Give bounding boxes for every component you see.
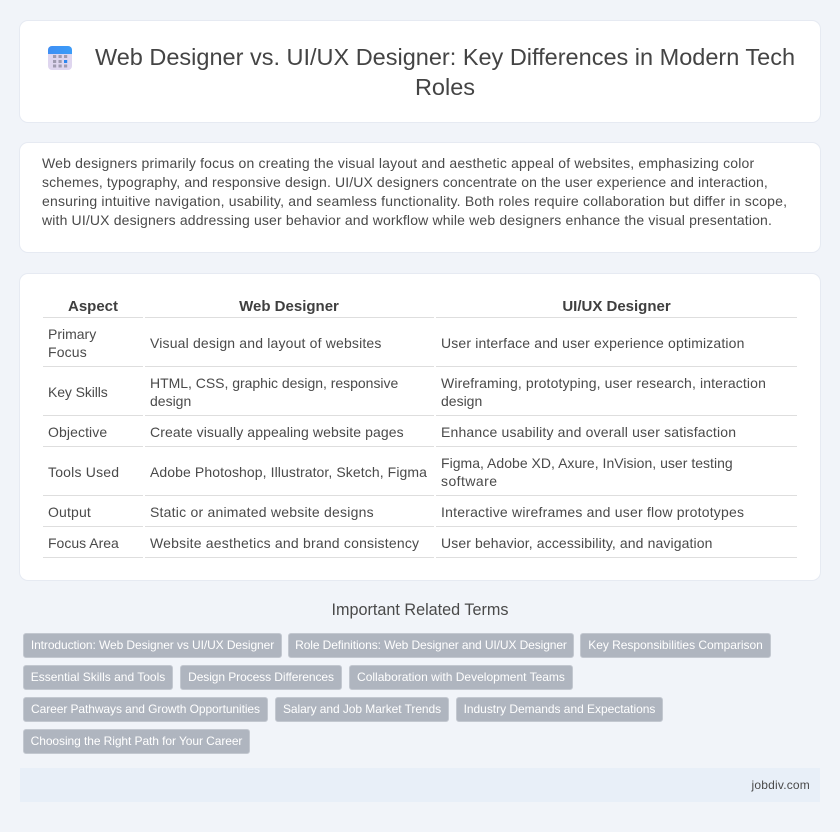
table header: Web Designer [239, 298, 339, 315]
related terms tags: Introduction: Web Designer vs UI/UX Designer [31, 638, 274, 652]
row: tools used: Figma, Adobe XD, Axure, InVision, user testing [441, 455, 733, 471]
table header: UI/UX Designer [562, 298, 671, 315]
footer source text: jobdiv.com [752, 778, 810, 792]
row: primary focus: Primary [48, 326, 96, 342]
intro paragraph [42, 155, 787, 228]
row: key skills: Wireframing, prototyping, user research, interaction [441, 375, 766, 391]
row: focus area [48, 535, 713, 551]
row: tools used: Tools Used [48, 464, 119, 480]
title: Roles [415, 74, 475, 100]
row: focus area: Website aesthetics and brand consistency [150, 535, 419, 551]
row: objective: Objective [48, 424, 107, 440]
comparison table card [20, 274, 820, 580]
row: key skills: Key Skills [48, 384, 108, 400]
title: Web Designer vs. UI/UX Designer: Key Differences in Modern Tech [95, 44, 795, 70]
intro text card [20, 143, 820, 252]
row: output [48, 504, 744, 520]
related terms tags: Role Definitions: Web Designer and UI/UX Designer [295, 638, 567, 652]
related terms tags: Salary and Job Market Trends [283, 702, 441, 716]
row: key skills: design [441, 393, 482, 409]
title [95, 44, 795, 100]
row: output: Static or animated website designs [150, 504, 374, 520]
row: key skills: HTML, CSS, graphic design, responsive [150, 375, 398, 391]
intro paragraph: with UI/UX designers addressing user behavior and workflow while web designers enhance the visual presentation. [42, 212, 772, 228]
row: objective [48, 424, 736, 440]
row: primary focus: Focus [48, 344, 87, 360]
row: focus area: User behavior, accessibility, and navigation [441, 535, 713, 551]
row: output: Interactive wireframes and user flow prototypes [441, 504, 744, 520]
related terms heading: Important Related Terms [332, 601, 508, 619]
row: objective: Create visually appealing website pages [150, 424, 404, 440]
row: output: Output [48, 504, 91, 520]
footer bar [20, 768, 820, 802]
row: primary focus [48, 326, 745, 360]
row: tools used [48, 455, 733, 489]
row: focus area: Focus Area [48, 535, 119, 551]
related terms tags: Industry Demands and Expectations [464, 702, 655, 716]
row: tools used: software [441, 473, 498, 489]
intro paragraph: Web designers primarily focus on creating the visual layout and aesthetic appeal of websites, emphasizing color [42, 155, 754, 171]
row: primary focus: Visual design and layout of websites [150, 335, 382, 351]
related terms tags: Collaboration with Development Teams [357, 670, 565, 684]
related terms tags: Career Pathways and Growth Opportunities [31, 702, 260, 716]
intro paragraph: schemes, typography, and responsive design. UI/UX designers concentrate on the user experience and interaction, [42, 174, 768, 190]
table header: Aspect [68, 298, 118, 315]
related terms tags: Design Process Differences [188, 670, 334, 684]
related terms tags: Choosing the Right Path for Your Career [31, 734, 242, 748]
related terms tags: Essential Skills and Tools [31, 670, 165, 684]
intro paragraph: ensuring intuitive navigation, usability, and seamless functionality. Both roles require collaboration but differ in scope, [42, 193, 787, 209]
row: primary focus: User interface and user experience optimization [441, 335, 745, 351]
row: key skills: design [150, 393, 191, 409]
related terms tags [23, 633, 771, 754]
row: key skills [48, 375, 766, 409]
table header [68, 298, 671, 315]
icon: calendar grid [48, 46, 72, 70]
row: tools used: Adobe Photoshop, Illustrator, Sketch, Figma [150, 464, 427, 480]
related terms tags: Key Responsibilities Comparison [588, 638, 763, 652]
header card [20, 21, 820, 122]
row: objective: Enhance usability and overall user satisfaction [441, 424, 736, 440]
